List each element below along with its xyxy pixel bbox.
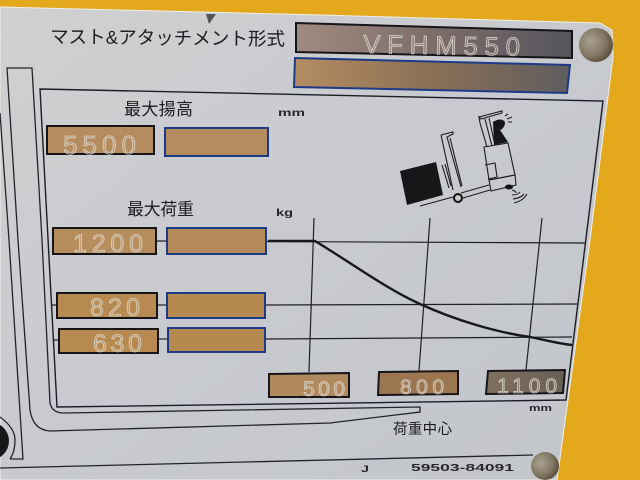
heading: maximum lift height: 最大揚高	[124, 100, 193, 119]
overhead guard	[479, 111, 502, 147]
front wheel	[454, 194, 462, 202]
load value box: 630: 630	[93, 330, 142, 358]
unit: mm: mm	[278, 107, 305, 119]
load value box: 630	[59, 329, 158, 358]
heading: maximum load: 最大荷重	[127, 200, 194, 219]
mast	[441, 132, 462, 190]
blank lift height box	[165, 128, 268, 156]
load value box: 1200: 1200	[73, 230, 143, 258]
chart grid lines	[52, 218, 585, 372]
load chart frame	[40, 89, 603, 407]
plate heading: mast and attachment type: マスト&アタッチメント形式	[50, 26, 285, 49]
load value box: 820	[57, 293, 157, 322]
load center value box: 500	[269, 373, 349, 401]
part number: 59503-84091	[411, 463, 515, 474]
type value box: VFHM550: VFHM550	[363, 29, 520, 62]
mast wheel	[0, 422, 9, 460]
blank load box 3	[168, 328, 265, 352]
blank attachment box	[294, 58, 570, 93]
blank load box 2	[167, 293, 265, 318]
truck body	[484, 143, 515, 180]
rivet top right	[579, 28, 613, 62]
left mast and fork outline	[0, 68, 533, 468]
load center value box: 1100: 1100	[497, 375, 557, 398]
plate dent	[206, 14, 216, 24]
fork	[420, 197, 453, 206]
truck base	[489, 175, 516, 191]
unit: kg: kg	[276, 207, 293, 219]
load capacity curve	[268, 241, 572, 345]
type value box: VFHM550	[296, 23, 572, 62]
unit: mm under load center: mm	[529, 403, 552, 414]
small mark J: J	[361, 464, 369, 474]
lift height value box: 5500	[47, 126, 154, 160]
load value box: 1200	[53, 228, 156, 258]
chassis leg	[461, 185, 490, 198]
blank load box 1	[167, 228, 266, 254]
label: load center: 荷重中心	[393, 421, 452, 438]
load center value box: 800	[378, 371, 458, 399]
load center value box: 1100	[486, 370, 565, 398]
driver	[493, 120, 508, 145]
load center value box: 800: 800	[400, 376, 444, 399]
icon: tipping forklift	[400, 111, 527, 206]
lift height value box: 5500: 5500	[63, 130, 136, 160]
battery panel	[485, 163, 497, 179]
rivet bottom right	[531, 452, 559, 480]
load block	[400, 162, 443, 205]
load value box: 820: 820	[90, 294, 140, 322]
load center value box: 500: 500	[303, 378, 345, 401]
impact lines	[505, 114, 512, 122]
rear wheel	[505, 184, 513, 190]
